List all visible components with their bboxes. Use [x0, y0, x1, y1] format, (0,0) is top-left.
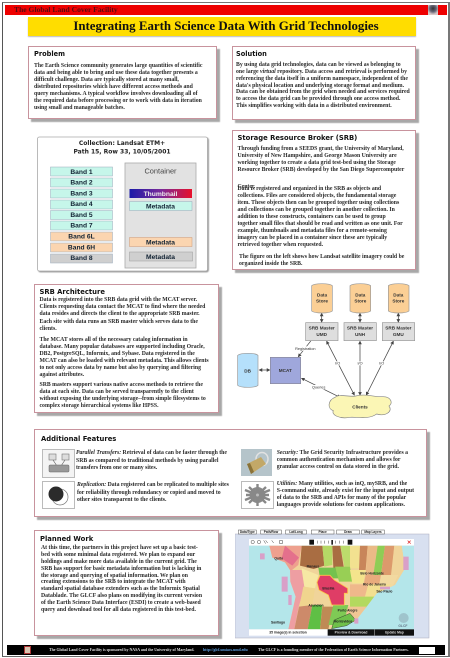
SRB figure note: organized inside the SRB.	[239, 261, 302, 267]
collection heading: Path 15, Row 33, 10/05/2001	[73, 148, 171, 156]
map image: Asuncion	[308, 604, 324, 608]
architecture paragraph 2: MCAT can also be loaded with relevant metadata. This allows clients	[40, 358, 209, 364]
map image: Sao Paulo	[376, 590, 392, 594]
planned work text: Datablade. The GLCF also plans on modifying its current version	[41, 593, 202, 599]
map status bar: Update Map	[385, 631, 404, 635]
panel: landsat collection figure: Band 6H	[68, 245, 95, 252]
security text: Security: The Grid Security Infrastructure provides a	[277, 450, 408, 456]
solution text: This simplifies working with data in a distributed environment.	[236, 103, 392, 109]
container: Container	[144, 166, 177, 176]
panel: landsat collection figure: Band 2	[70, 180, 93, 187]
connector labels: I/O	[357, 362, 363, 366]
DB cylinder	[238, 353, 258, 387]
replication text: for reliability through redundancy or copied and moved to	[77, 490, 221, 496]
architecture paragraph 3: without exposing the underlying storage--from simple filesystems to	[40, 396, 206, 402]
connector labels	[294, 346, 384, 390]
panel: problem	[28, 46, 217, 119]
map image: Manaus	[307, 564, 319, 568]
problem text: the required data before processing or to work with data in iteration	[34, 98, 202, 104]
MCAT box: MCAT	[279, 368, 292, 373]
map screenshot: Path/Row	[264, 530, 279, 534]
data stores	[312, 284, 409, 313]
planned work text: the storage and querying of spatial information. We plan on	[41, 573, 188, 579]
replication text	[77, 482, 229, 503]
SRB masters: SRB Master	[347, 326, 373, 331]
map window	[235, 534, 429, 638]
SRB objects text: and collections can be grouped together in another collection. In	[238, 207, 395, 213]
SRB heading: Storage Resource Broker (SRB)	[238, 134, 357, 142]
problem text	[34, 62, 202, 111]
architecture paragraph 3: complex storage hierarchical systems like HPSS.	[40, 402, 159, 408]
parallel transfers text	[76, 450, 227, 471]
architecture paragraph 1: Clients requesting data contact the MCAT to find where the needed	[40, 304, 205, 310]
map image: Brasilia	[322, 586, 335, 590]
icon: parallel transfer	[42, 449, 75, 478]
solution text	[236, 62, 410, 109]
SRB objects text: addition to these constructs, containers can be used to group	[238, 214, 386, 220]
architecture paragraph 1: clients.	[40, 326, 57, 332]
panel: landsat collection figure: Band 4	[70, 201, 93, 208]
map screenshot: Map Layers	[364, 530, 382, 534]
SRB masters: UNH	[355, 332, 366, 337]
container: Metadata	[146, 254, 175, 261]
architecture paragraph 1: Each site with data runs an SRB master which serves data to the	[40, 319, 198, 325]
icon: replication	[42, 481, 75, 509]
SRB objects text: retrieved together when requested.	[238, 242, 323, 248]
panel: SRB architecture	[34, 284, 219, 413]
utilities text: S-command suite, already exist for the input and output	[277, 488, 414, 494]
connector labels: I/O	[335, 362, 340, 366]
SRB masters: UMD	[316, 332, 328, 337]
architecture paragraph 3: data at each site. Data can be served transparently to the client	[40, 388, 194, 394]
planned work text: holdings and make more data available in the current grid. The	[41, 559, 197, 565]
sponsor text: The Global Land Cover Facility is sponsored by NASA and the University of Maryland.	[49, 648, 194, 652]
security text: common authentication mechanism and allows for	[277, 456, 400, 462]
data stores: Data	[317, 293, 327, 298]
icon: maryland emblem	[24, 646, 31, 654]
clients cloud	[329, 395, 391, 418]
parallel transfers text: transfers from one or many sites.	[76, 465, 157, 471]
solution text: Data can be obtained from the grid when needed and services required	[236, 89, 410, 95]
MCAT box	[270, 357, 301, 384]
planned work text: SRB has support for basic metadata information but is lacking in	[41, 566, 201, 572]
parallel transfers text: Parallel Transfers: Retrieval of data can be faster through the	[76, 450, 227, 456]
architecture paragraph 1: data resides and directs the client to the appropriate SRB master.	[40, 311, 200, 317]
architecture paragraph 1	[40, 296, 206, 332]
solution text: referencing the data itself in a uniform namespace, independent of the	[236, 76, 408, 82]
connector labels: I/O	[379, 362, 384, 366]
icon: globe emblem	[428, 5, 438, 15]
planned work text	[41, 544, 202, 613]
panel: landsat collection figure: Band 7	[70, 223, 93, 230]
panel: additional features	[34, 429, 427, 517]
planned work heading: Planned Work	[40, 535, 93, 543]
map image: Porto Alegre	[338, 608, 358, 612]
container: Thumbnail	[144, 191, 178, 198]
solution text: one large virtual repository. Data access and retrieval is performed by	[236, 69, 407, 75]
architecture paragraph 2	[40, 336, 209, 378]
map status bar: 35 image(s) in selection	[269, 631, 307, 635]
data stores: Store	[392, 298, 405, 303]
security text	[276, 450, 408, 470]
architecture paragraph 2: against attributes.	[40, 372, 84, 378]
panel: landsat collection figure: Band 1	[70, 169, 93, 176]
map image: Rio de Janeiro	[363, 583, 386, 587]
map screenshot: Data/Type	[240, 530, 255, 534]
architecture paragraph 2: to not only access data by name but also by querying and filtering	[40, 364, 201, 370]
footer bar	[7, 645, 445, 655]
panel: landsat collection figure: Band 5	[70, 212, 93, 219]
SRB figure note: The figure on the left shows how Landsat satellite imagery could be	[239, 254, 404, 260]
parallel transfers text: SRB as compared to traditional methods by using parallel	[76, 458, 218, 464]
features heading: Additional Features	[41, 435, 116, 443]
SRB intro text: Through funding from a SEEDS grant, the University of Maryland,	[238, 146, 404, 152]
data stores: Store	[316, 298, 328, 303]
utilities text: languages provide solutions for custom applications.	[277, 502, 405, 508]
architecture paragraph 2: database. Many popular databases are supported including Oracle,	[40, 344, 205, 350]
SRB masters	[306, 323, 415, 341]
utilities text: Utilities: Many utilities, such as inQ, mySRB, and the	[277, 481, 407, 487]
SRB objects text: example, thumbnails and metadata files for a remote-sensing	[238, 228, 387, 234]
map status bar	[249, 629, 414, 636]
SRB masters: GMU	[393, 332, 404, 337]
icon: gear	[241, 481, 274, 509]
data stores: Data	[393, 293, 404, 298]
SRB intro text: working together to create a data grid test-bed using the Storage	[238, 160, 396, 166]
utilities text: of data to the SRB and APIs for many of the popular	[277, 495, 406, 501]
SRB objects text: collections. Files are considered objects, the fundamental storage	[238, 193, 396, 199]
data stores: Data	[355, 293, 366, 298]
problem text: The Earth Science community generates large quantities of scientific	[34, 63, 202, 69]
panel: landsat collection figure	[37, 136, 210, 273]
replication text: Replication: Data registered can be replicated to multiple sites	[77, 482, 229, 488]
data stores: Store	[354, 298, 367, 303]
SRB masters: SRB Master	[385, 326, 412, 331]
container	[125, 163, 196, 268]
planned work text: At this time, the partners in this project have set up a basic test-	[41, 545, 198, 551]
icon: padlock	[241, 449, 272, 476]
SRB objects text: item. These objects then can be grouped together using collections	[238, 200, 399, 206]
federation logo	[419, 647, 435, 654]
toolbar	[249, 539, 414, 546]
footer link: http://glcf.umiacs.umd.edu	[203, 648, 248, 652]
map screenshot: Place	[319, 530, 327, 534]
SRB objects text: together small files that should be read and written as one unit. For	[238, 221, 403, 227]
problem text: query mechanisms. A typical workflow involves downloading all of	[34, 91, 198, 97]
architecture paragraph 2: The MCAT stores all of the necessary catalog information in	[40, 336, 188, 342]
architecture paragraph 3: SRB masters support various native access methods to retrieve the	[40, 382, 203, 388]
map image: GLCF	[398, 624, 407, 628]
band list	[50, 167, 112, 263]
title banner	[28, 17, 416, 36]
solution heading: Solution	[236, 50, 267, 58]
architecture heading: SRB Architecture	[40, 288, 105, 296]
architecture paragraph 3	[40, 382, 206, 408]
map status bar: Preview & Download	[335, 631, 367, 635]
utilities text	[276, 480, 414, 508]
SRB objects text	[238, 186, 403, 248]
connector labels: Queries	[312, 386, 325, 390]
clients cloud: Clients	[352, 405, 368, 410]
collection heading: Collection: Landsat ETM+	[79, 140, 165, 147]
planned work text: bed with some minimal data registered. We plan to expand our	[41, 552, 195, 558]
replication text: other sites transparent to the clients.	[77, 497, 166, 503]
panel: solution	[232, 46, 416, 120]
map screenshot: Draw	[344, 530, 352, 534]
federation text: The GLCF is a founding member of the Federation of Earth Science Information Partners.	[258, 648, 409, 652]
title banner: Integrating Earth Science Data With Grid Technologies	[73, 19, 379, 33]
architecture diagram	[237, 283, 415, 418]
solution text: data's physical location and underlying storage format and medium.	[236, 83, 404, 89]
planned work text: of the Earth Science Data Interface (ESDI) to create a web-based	[41, 600, 201, 606]
arrows	[259, 313, 398, 397]
planned work text: query and download tool for all data registered in this test-bed.	[41, 607, 196, 613]
problem text: difficult challenge. Data are typically stored at many small,	[34, 77, 179, 83]
panel: storage resource broker	[232, 130, 416, 270]
SRB objects text: imagery can be placed in a container since these are typically	[238, 235, 387, 241]
solution text: to access the data grid can be provided through one access method.	[236, 96, 400, 102]
panel: landsat collection figure: Band 3	[70, 191, 93, 198]
DB cylinder: DB	[244, 369, 252, 374]
container: Metadata	[146, 204, 175, 210]
solution text: By using data grid technologies, data can be viewed as belonging to	[236, 62, 401, 68]
panel: planned work	[34, 530, 219, 636]
SRB intro text: University of New Hampshire, and George Mason University are	[238, 152, 397, 158]
panel: landsat collection figure: Band 8	[70, 255, 93, 262]
map image	[249, 546, 414, 629]
architecture paragraph 1: Data is registered into the SRB data grid with the MCAT server.	[40, 297, 197, 303]
container: Metadata	[146, 240, 175, 246]
collection heading	[73, 140, 171, 156]
architecture paragraph 2: DB2, PostgreSQL, Informix, and Sybase. Data registered in the	[40, 350, 195, 356]
security text: granular access control on data stored in the grid.	[277, 464, 399, 470]
header bar	[5, 5, 447, 15]
planned work text: standard spatial database extenders such as the Informix Spatial	[41, 586, 200, 592]
problem text: data and being able to bring and use these data together presents a	[34, 70, 198, 76]
panel: landsat collection figure: Band 6L	[68, 234, 95, 241]
map image: Santiago	[271, 621, 285, 625]
connector labels: Registration	[295, 347, 316, 351]
SRB intro text	[238, 146, 404, 172]
problem text: distributed repositories which have different access methods and	[34, 84, 193, 90]
planned work text: creating extensions to the SRB to integrate the MCAT with	[41, 579, 186, 585]
map image: Quito	[274, 557, 283, 561]
map image: Belo Horizonte	[360, 571, 384, 575]
SRB intro text: Resource Broker (SRB) developed by the San Diego Supercomputer	[238, 166, 404, 172]
map screenshot: Lat/Long	[289, 530, 303, 534]
SRB masters: SRB Master	[309, 326, 335, 331]
problem heading: Problem	[34, 50, 65, 58]
map screenshot	[235, 530, 430, 638]
SRB objects text: Data is registered and organized in the SRB as objects and	[238, 186, 381, 192]
problem text: using small and manageable batches.	[34, 105, 125, 111]
map image: Montevideo	[334, 619, 352, 623]
tabs	[238, 530, 384, 534]
SRB figure note	[239, 254, 404, 267]
header label: The Global Land Cover Facility	[14, 5, 118, 14]
SRB overlapping word: Center.	[238, 184, 255, 190]
